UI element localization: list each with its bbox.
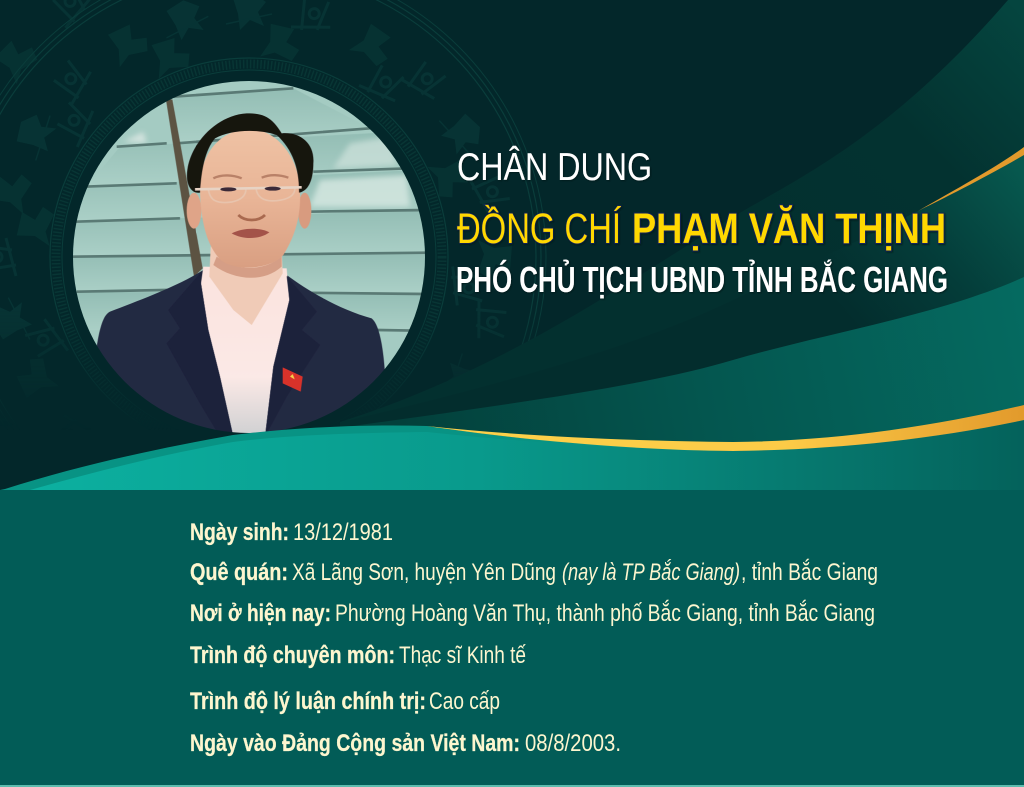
brows xyxy=(213,175,288,178)
professional qualification: Thạc sĩ Kinh tế xyxy=(399,642,526,669)
title: Chân dung: CHÂN DUNG xyxy=(457,146,652,189)
portrait photo xyxy=(70,77,430,437)
upper wave band xyxy=(340,0,1024,440)
nose xyxy=(238,215,265,220)
jacket lapels xyxy=(167,272,233,437)
hometown: (nay là TP Bắc Giang) xyxy=(562,559,740,586)
mouth xyxy=(232,229,269,238)
party admission date: Ngày vào Đảng Cộng sản Việt Nam: xyxy=(190,730,520,757)
date of birth xyxy=(190,519,393,546)
gold ribbon xyxy=(427,405,1024,451)
current residence: Phường Hoàng Văn Thụ, thành phố Bắc Giang, tỉnh Bắc Giang xyxy=(335,600,875,627)
eyes xyxy=(220,187,236,191)
title: name: PHẠM VĂN THỊNH xyxy=(632,205,946,253)
current residence xyxy=(190,600,875,627)
date of birth: 13/12/1981 xyxy=(293,519,393,546)
hometown: Quê quán: xyxy=(190,559,288,586)
date of birth: Ngày sinh: xyxy=(190,519,289,546)
bronze drum pattern xyxy=(0,0,546,382)
neck xyxy=(209,247,283,325)
face xyxy=(200,128,300,268)
teal wave xyxy=(0,420,1024,490)
current residence: Nơi ở hiện nay: xyxy=(190,600,331,627)
glasses xyxy=(195,187,302,203)
suit jacket xyxy=(96,270,385,432)
hometown xyxy=(190,559,878,586)
lower wave band xyxy=(310,277,1024,450)
hometown: Xã Lãng Sơn, huyện Yên Dũng xyxy=(292,559,556,586)
middle wave band xyxy=(350,150,1024,440)
details panel xyxy=(0,490,1024,787)
flag pin xyxy=(283,367,303,392)
political theory level: Trình độ lý luận chính trị: xyxy=(190,688,426,715)
portrait background slats xyxy=(74,81,408,370)
political theory level: Cao cấp xyxy=(429,688,500,715)
inner teal wave xyxy=(30,420,1024,490)
gold sliver xyxy=(918,147,1024,211)
professional qualification: Trình độ chuyên môn: xyxy=(190,642,395,669)
light patches on slats xyxy=(123,132,410,207)
shirt xyxy=(201,267,289,437)
drum rings xyxy=(0,0,546,382)
ears xyxy=(187,193,201,229)
header background xyxy=(0,0,1024,490)
hair xyxy=(187,113,313,193)
hometown: , tỉnh Bắc Giang xyxy=(741,559,878,586)
title text xyxy=(456,146,948,300)
party admission date: 08/8/2003. xyxy=(525,730,621,757)
drum motifs xyxy=(0,0,512,347)
title: Đồng chí: ĐỒNG CHÍ xyxy=(457,204,621,253)
